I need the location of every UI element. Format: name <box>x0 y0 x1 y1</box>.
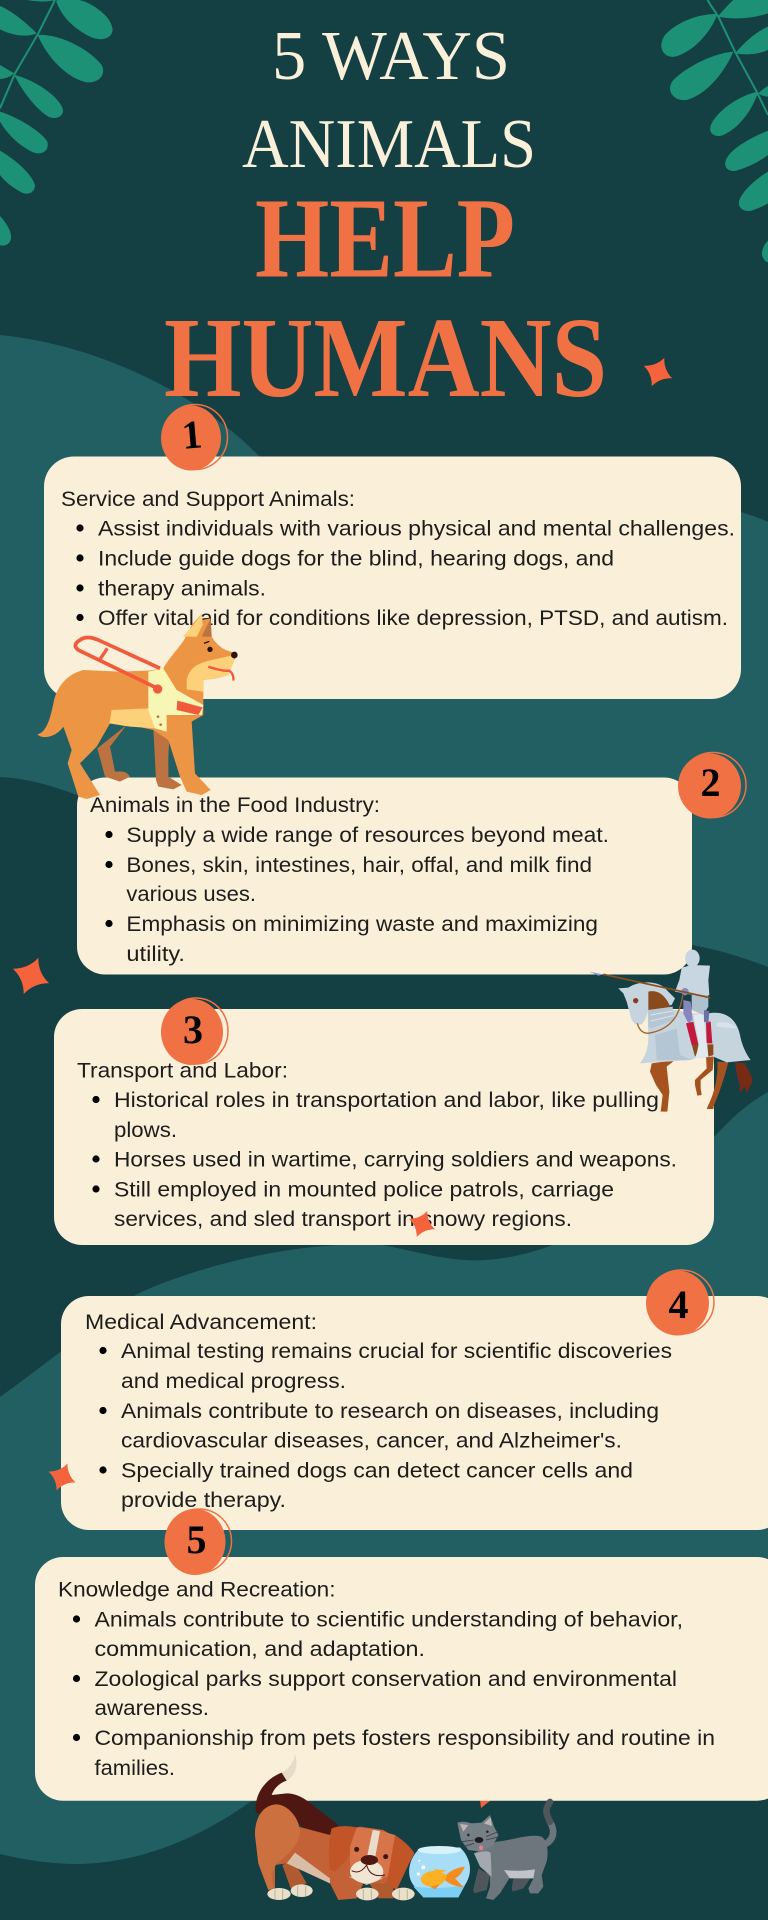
illustration: guide dog with harness <box>37 614 238 799</box>
leaves: top right branch <box>661 0 768 262</box>
bullet list 4: Animals contribute to research on diseases, including <box>121 1400 659 1423</box>
sparkle star on panel 3 <box>404 1206 440 1242</box>
leaves: top left branch <box>0 0 113 246</box>
number badge 5: 5 <box>186 1517 206 1562</box>
sparkle star left <box>6 951 56 1001</box>
bullet list 2: Supply a wide range of resources beyond meat. <box>126 824 609 847</box>
heading 2: Animals in the Food Industry: <box>90 794 380 817</box>
bullet list 4: cardiovascular diseases, cancer, and Alzheimer's. <box>121 1430 622 1453</box>
number badge 2: 2 <box>700 760 720 805</box>
panel 1: service and support animals <box>44 456 741 699</box>
number badge 4: 4 <box>668 1282 688 1327</box>
title line: HELP: HELP <box>255 174 515 302</box>
heading 1: Service and Support Animals: <box>61 488 355 511</box>
background wave: lower teal blob <box>0 1092 768 1864</box>
bullet list 3: Still employed in mounted police patrols, carriage <box>114 1179 614 1202</box>
panel 3: transport and labor <box>54 1009 714 1245</box>
number badge 3 <box>161 998 228 1065</box>
bullet list 5: Companionship from pets fosters responsibility and routine in <box>94 1727 715 1750</box>
bullet list 3: services, and sled transport in snowy regions. <box>114 1208 572 1231</box>
bullet list 5 <box>73 1609 715 1780</box>
number badge 4 <box>646 1270 714 1336</box>
bullet list 1: Include guide dogs for the blind, hearing dogs, and <box>98 548 614 570</box>
bullet list 4 <box>99 1340 672 1512</box>
bullet list 4: Animal testing remains crucial for scientific discoveries <box>121 1340 672 1363</box>
dog <box>255 1754 415 1900</box>
bullet list 4: provide therapy. <box>121 1489 286 1512</box>
bullet list 3: Horses used in wartime, carrying soldiers and weapons. <box>114 1149 677 1172</box>
heading 4: Medical Advancement: <box>85 1311 317 1334</box>
number badge 1: 1 <box>180 411 204 458</box>
number badge 1 <box>161 404 228 470</box>
bullet list 5: families. <box>94 1757 175 1780</box>
bullet list 2: utility. <box>126 943 185 966</box>
heading 3: Transport and Labor: <box>77 1059 288 1082</box>
background wave: upper teal blob <box>0 335 768 967</box>
number badge 5 <box>164 1509 232 1575</box>
panel 2: animals in the food industry <box>77 778 692 974</box>
bullet list 3: Historical roles in transportation and labor, like pulling <box>114 1089 659 1112</box>
bullet list 2: Bones, skin, intestines, hair, offal, and milk find <box>126 854 592 877</box>
bullet list 5: Animals contribute to scientific understanding of behavior, <box>94 1609 683 1632</box>
bullet list 4: Specially trained dogs can detect cancer cells and <box>121 1460 633 1483</box>
illustration: armored knight on horse <box>589 950 752 1112</box>
bullet list 5: awareness. <box>94 1697 209 1720</box>
bullet list 1: Assist individuals with various physical and mental challenges. <box>98 518 735 541</box>
cat <box>457 1802 553 1900</box>
bullet list 3 <box>92 1089 677 1231</box>
title <box>164 18 607 421</box>
bullet list 1: Offer vital aid for conditions like depression, PTSD, and autism. <box>98 607 728 630</box>
bullet list 2: Emphasis on minimizing waste and maximizing <box>126 913 598 936</box>
fishbowl <box>409 1846 470 1897</box>
panel 5: knowledge and recreation <box>35 1557 768 1801</box>
panel 4: medical advancement <box>61 1296 768 1530</box>
bullet list 2 <box>105 824 609 966</box>
title line: 5 WAYS: 5 WAYS <box>272 18 510 95</box>
bullet list 4: and medical progress. <box>121 1370 346 1393</box>
bullet list 1 <box>76 518 735 630</box>
number badge 3: 3 <box>183 1007 203 1052</box>
sparkle star by title <box>638 352 678 392</box>
bullet list 3: plows. <box>114 1119 177 1142</box>
illustration: dog, fishbowl and cat <box>255 1754 553 1900</box>
bullet list 2: various uses. <box>126 883 256 906</box>
number badge 2 <box>678 752 746 818</box>
bullet list 5: communication, and adaptation. <box>94 1638 425 1661</box>
bullet list 5: Zoological parks support conservation and environmental <box>94 1668 677 1691</box>
heading 5: Knowledge and Recreation: <box>58 1579 336 1602</box>
sparkle star on panel 4 <box>43 1458 81 1496</box>
title line: HUMANS: HUMANS <box>164 294 607 421</box>
title line: ANIMALS: ANIMALS <box>242 106 536 183</box>
bullet list 1: therapy animals. <box>98 577 266 600</box>
sparkle star hidden behind panel 5 <box>480 1800 491 1808</box>
